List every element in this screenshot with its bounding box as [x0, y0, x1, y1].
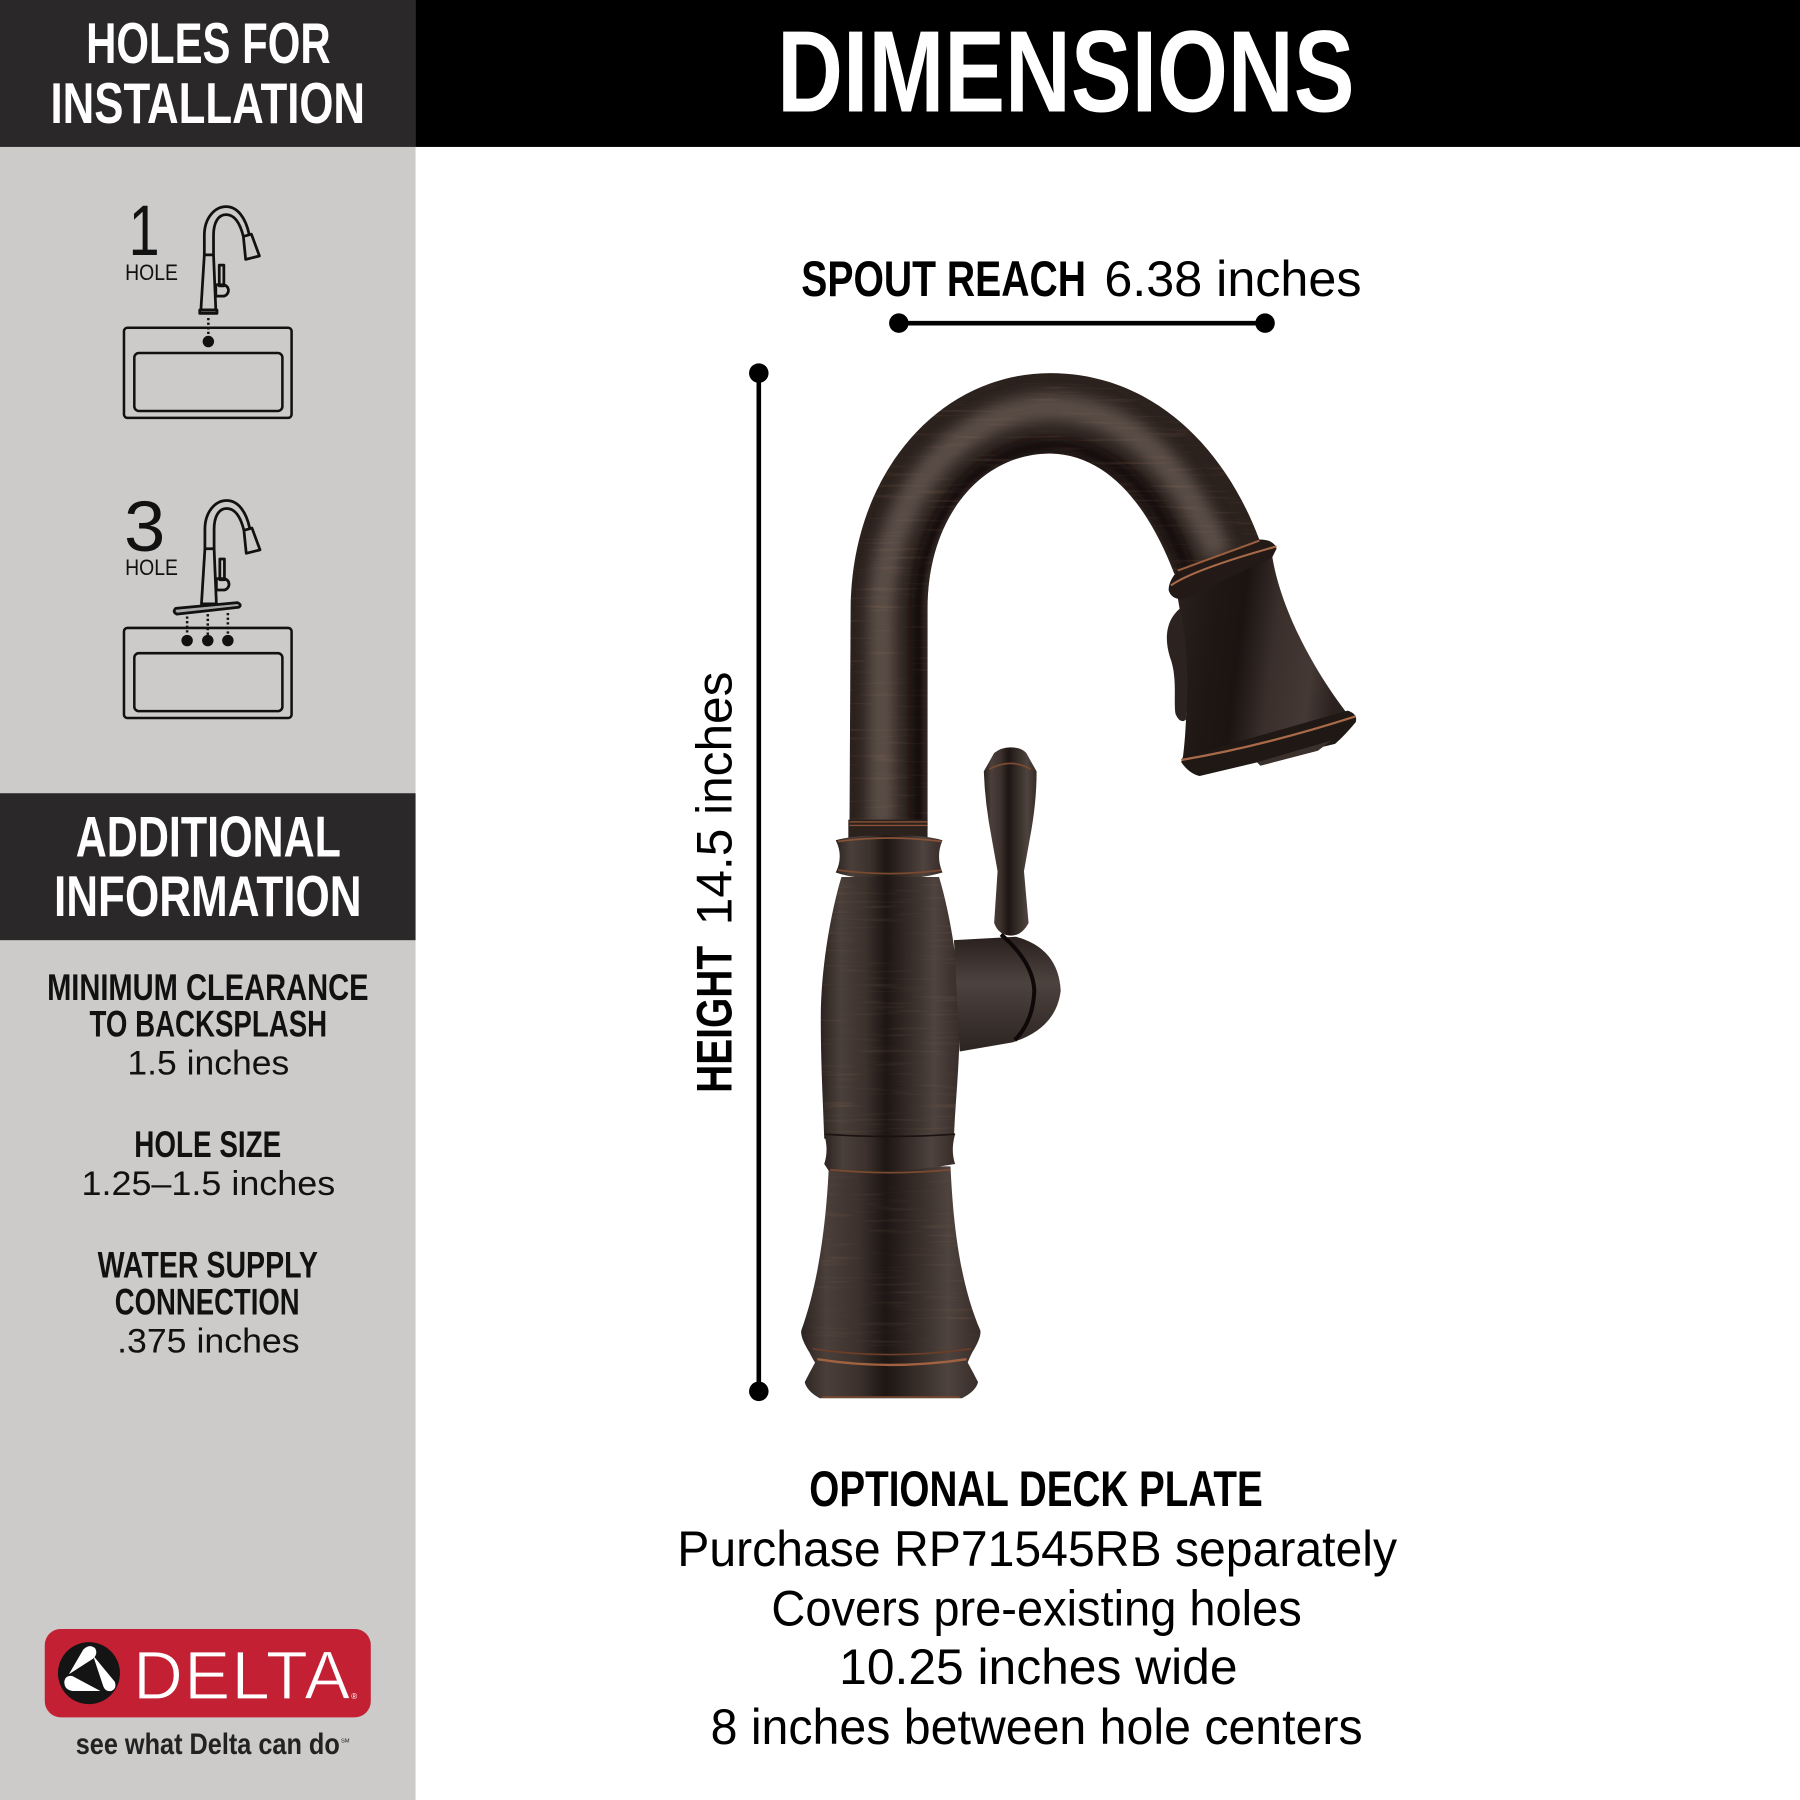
text: optional deck plate: OPTIONAL DECK PLATE [809, 1460, 1263, 1517]
measure: height: HEIGHT [685, 946, 742, 1093]
faucet lever handle [984, 747, 1037, 936]
heading: additional information [0, 793, 416, 940]
heading: holes for installation: HOLES FOR [86, 12, 331, 76]
text: minimum clearance to backsplash: 1.5 inches [127, 1044, 289, 1082]
label: 3 hole: 3 [124, 488, 165, 567]
text: water supply connection [98, 1245, 318, 1360]
label: 3 hole [124, 488, 178, 580]
faucet lower ring [824, 1131, 955, 1173]
heading: holes for installation: INSTALLATION [51, 72, 365, 136]
text: hole size: 1.25–1.5 inches [82, 1165, 335, 1203]
label: 3 hole: HOLE [125, 555, 178, 580]
faucet base [798, 1166, 987, 1398]
panel: left sidebar [0, 147, 416, 1800]
text: water supply connection: CONNECTION [115, 1281, 300, 1322]
text: optional deck plate: Covers pre-existing holes [771, 1580, 1302, 1637]
tagline: SM [341, 1739, 350, 1745]
logo badge [45, 1629, 371, 1717]
text: hole size: HOLE SIZE [134, 1124, 281, 1165]
heading: holes for installation [0, 0, 416, 147]
icon: sink with three holes [124, 613, 292, 718]
faucet pull-down head [1167, 554, 1356, 776]
icon: faucet outline with deck plate [174, 501, 260, 614]
faucet body [815, 877, 964, 1139]
heading: additional information: INFORMATION [54, 865, 362, 929]
text: minimum clearance to backsplash: MINIMUM CLEARANCE [47, 967, 368, 1008]
logo badge: DELTA [133, 1637, 350, 1714]
measure: spout reach: 6.38 inches [1104, 250, 1361, 307]
icon: three hole installation [124, 488, 292, 718]
measure: spout reach [801, 250, 1361, 333]
faucet handle hub [954, 934, 1061, 1052]
measure: height: 14.5 inches [685, 672, 742, 925]
text: water supply connection: .375 inches [117, 1322, 300, 1360]
text: minimum clearance to backsplash [47, 967, 368, 1082]
title: dimensions: DIMENSIONS [777, 6, 1355, 136]
text: hole size [82, 1124, 335, 1203]
label: 1 hole: HOLE [125, 260, 178, 285]
icon: one hole installation [124, 192, 292, 418]
measure: height [685, 363, 769, 1401]
faucet neck collar [836, 820, 942, 879]
faucet spout [838, 367, 1268, 838]
label: 1 hole: 1 [129, 192, 160, 271]
title: dimensions [416, 0, 1800, 147]
measure: spout reach: SPOUT REACH [801, 250, 1086, 307]
faucet head collar [1169, 540, 1277, 599]
heading: additional information: ADDITIONAL [76, 805, 341, 869]
text: water supply connection: WATER SUPPLY [98, 1245, 318, 1286]
logo badge: ® [351, 1692, 357, 1701]
faucet photo illustration [798, 367, 1356, 1398]
text: optional deck plate: Purchase RP71545RB separately [677, 1520, 1398, 1577]
text: minimum clearance to backsplash: TO BACKSPLASH [90, 1004, 327, 1045]
icon: sink with one hole [124, 318, 292, 418]
icon: faucet outline [200, 207, 259, 313]
tagline: see what Delta can do [76, 1728, 340, 1761]
logo: delta [45, 1629, 371, 1761]
text: optional deck plate: 8 inches between hole centers [711, 1698, 1363, 1755]
text: optional deck plate [677, 1460, 1398, 1755]
label: 1 hole [125, 192, 178, 285]
text: optional deck plate: 10.25 inches wide [839, 1638, 1237, 1695]
